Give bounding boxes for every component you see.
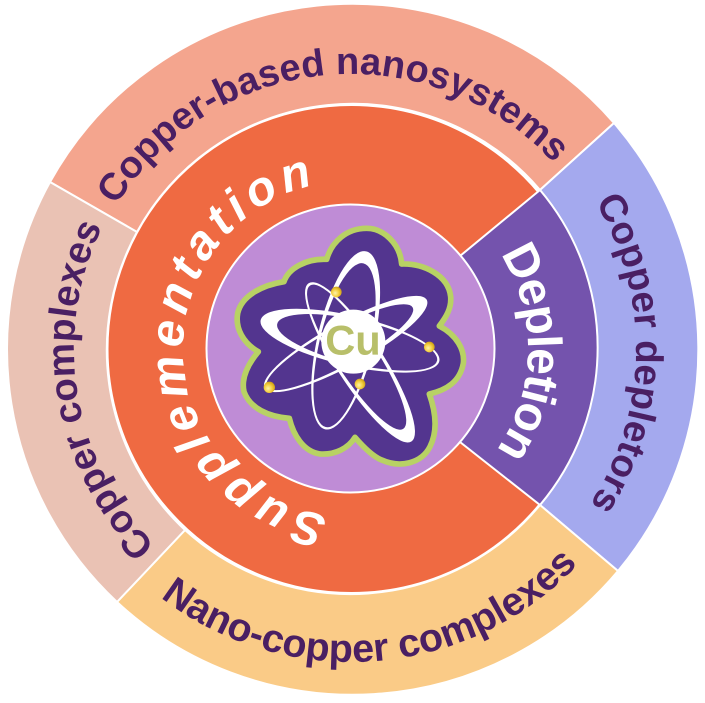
label: Copper depletors: Copper depletors [593,194,664,511]
label: Nano-copper complexes: Nano-copper complexes [162,554,574,670]
orbit 4 [289,271,431,454]
orbit 2 [254,281,437,407]
orbit 3 [298,245,394,436]
orbit 1 [255,296,445,386]
icon: copper atom [237,228,464,464]
label: Copper-based nanosystems: Copper-based nanosystems [100,48,564,200]
panel: Copper-based nanosystems segment [52,4,612,230]
panel: Depletion wedge [460,190,598,505]
panel: Copper complexes segment [8,182,185,602]
label: Copper complexes: Copper complexes [48,222,150,558]
panel: inner circle [206,204,494,492]
label: Depletion: Depletion [498,241,563,458]
panel: Nano-copper complexes segment [118,505,618,694]
panel: Supplementation ring [108,105,596,593]
electrons [264,287,435,393]
flower shape [237,228,464,464]
panel: Copper depletors segment [540,123,698,570]
label: Cu: Cu [325,316,381,363]
label: Supplementation: Supplementation [158,162,325,546]
nucleus [321,310,385,374]
